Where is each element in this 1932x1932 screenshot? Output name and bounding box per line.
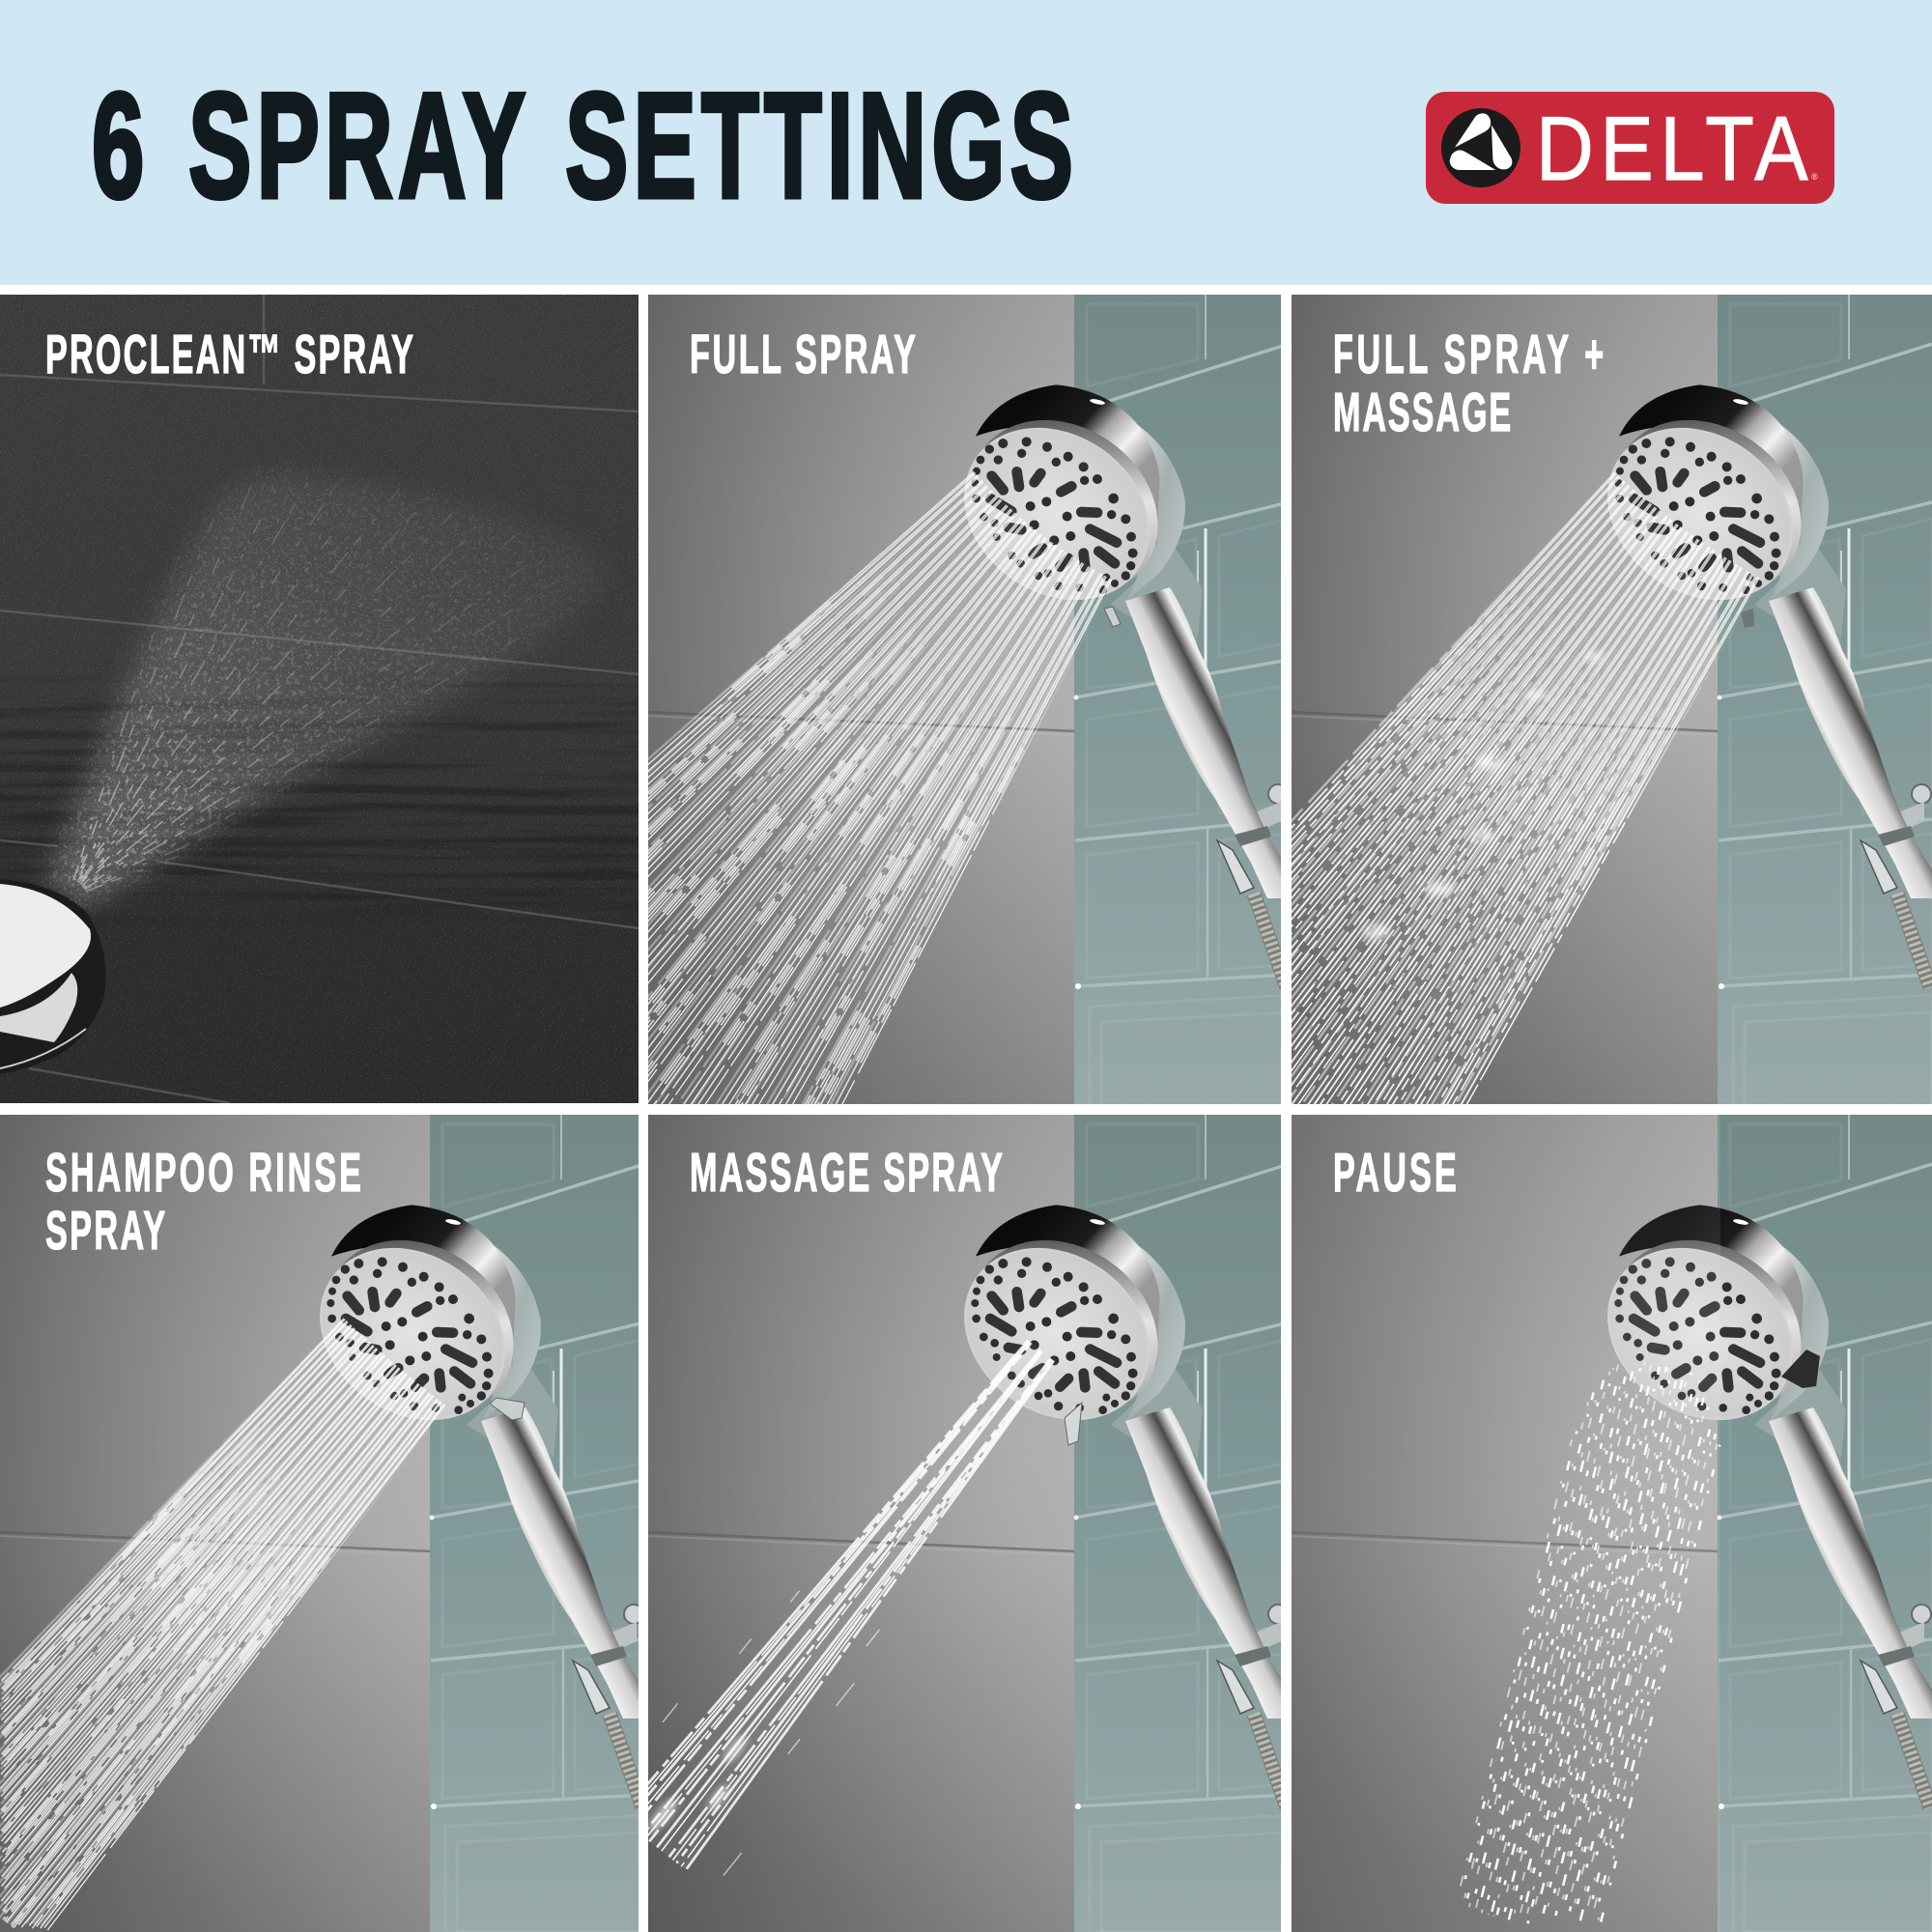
water streams — [1292, 471, 1761, 1104]
title: 6 — [92, 63, 181, 230]
water streams — [648, 471, 1114, 1104]
lever — [1781, 1350, 1820, 1388]
label: PAUSE — [1333, 1141, 1457, 1203]
label: FULL SPRAY + — [1333, 323, 1604, 384]
logo: Delta: ® — [1811, 172, 1818, 182]
label: PROCLEAN™ SPRAY — [45, 323, 413, 384]
lever — [1104, 607, 1121, 627]
panel: full spray + massage — [1292, 295, 1932, 1104]
label line 2: SPRAY — [45, 1199, 165, 1261]
water streams — [0, 1300, 473, 1932]
logo: Delta — [1426, 92, 1834, 204]
water ribbons — [589, 1302, 1102, 1890]
title: SETTINGS — [565, 63, 1078, 230]
lever — [490, 1398, 525, 1420]
label: FULL SPRAY — [690, 323, 916, 384]
label line 2: MASSAGE — [1333, 381, 1511, 442]
lever — [1741, 609, 1754, 628]
logo: Delta: DELTA — [1536, 98, 1808, 199]
water mist — [37, 464, 597, 916]
shower head edge — [0, 879, 106, 1074]
label: SHAMPOO RINSE — [45, 1141, 361, 1203]
panel: shampoo rinse spray — [0, 1105, 644, 1932]
label: MASSAGE SPRAY — [690, 1141, 1003, 1203]
water droplets — [1456, 1349, 1735, 1932]
title: SPRAY — [188, 63, 560, 230]
panel: pause — [1288, 1105, 1932, 1932]
panel: ProClean spray — [0, 295, 639, 1103]
header band — [0, 0, 1932, 285]
panel: massage spray — [589, 1105, 1289, 1932]
panel: full spray — [648, 295, 1281, 1104]
lever — [1065, 1403, 1082, 1445]
